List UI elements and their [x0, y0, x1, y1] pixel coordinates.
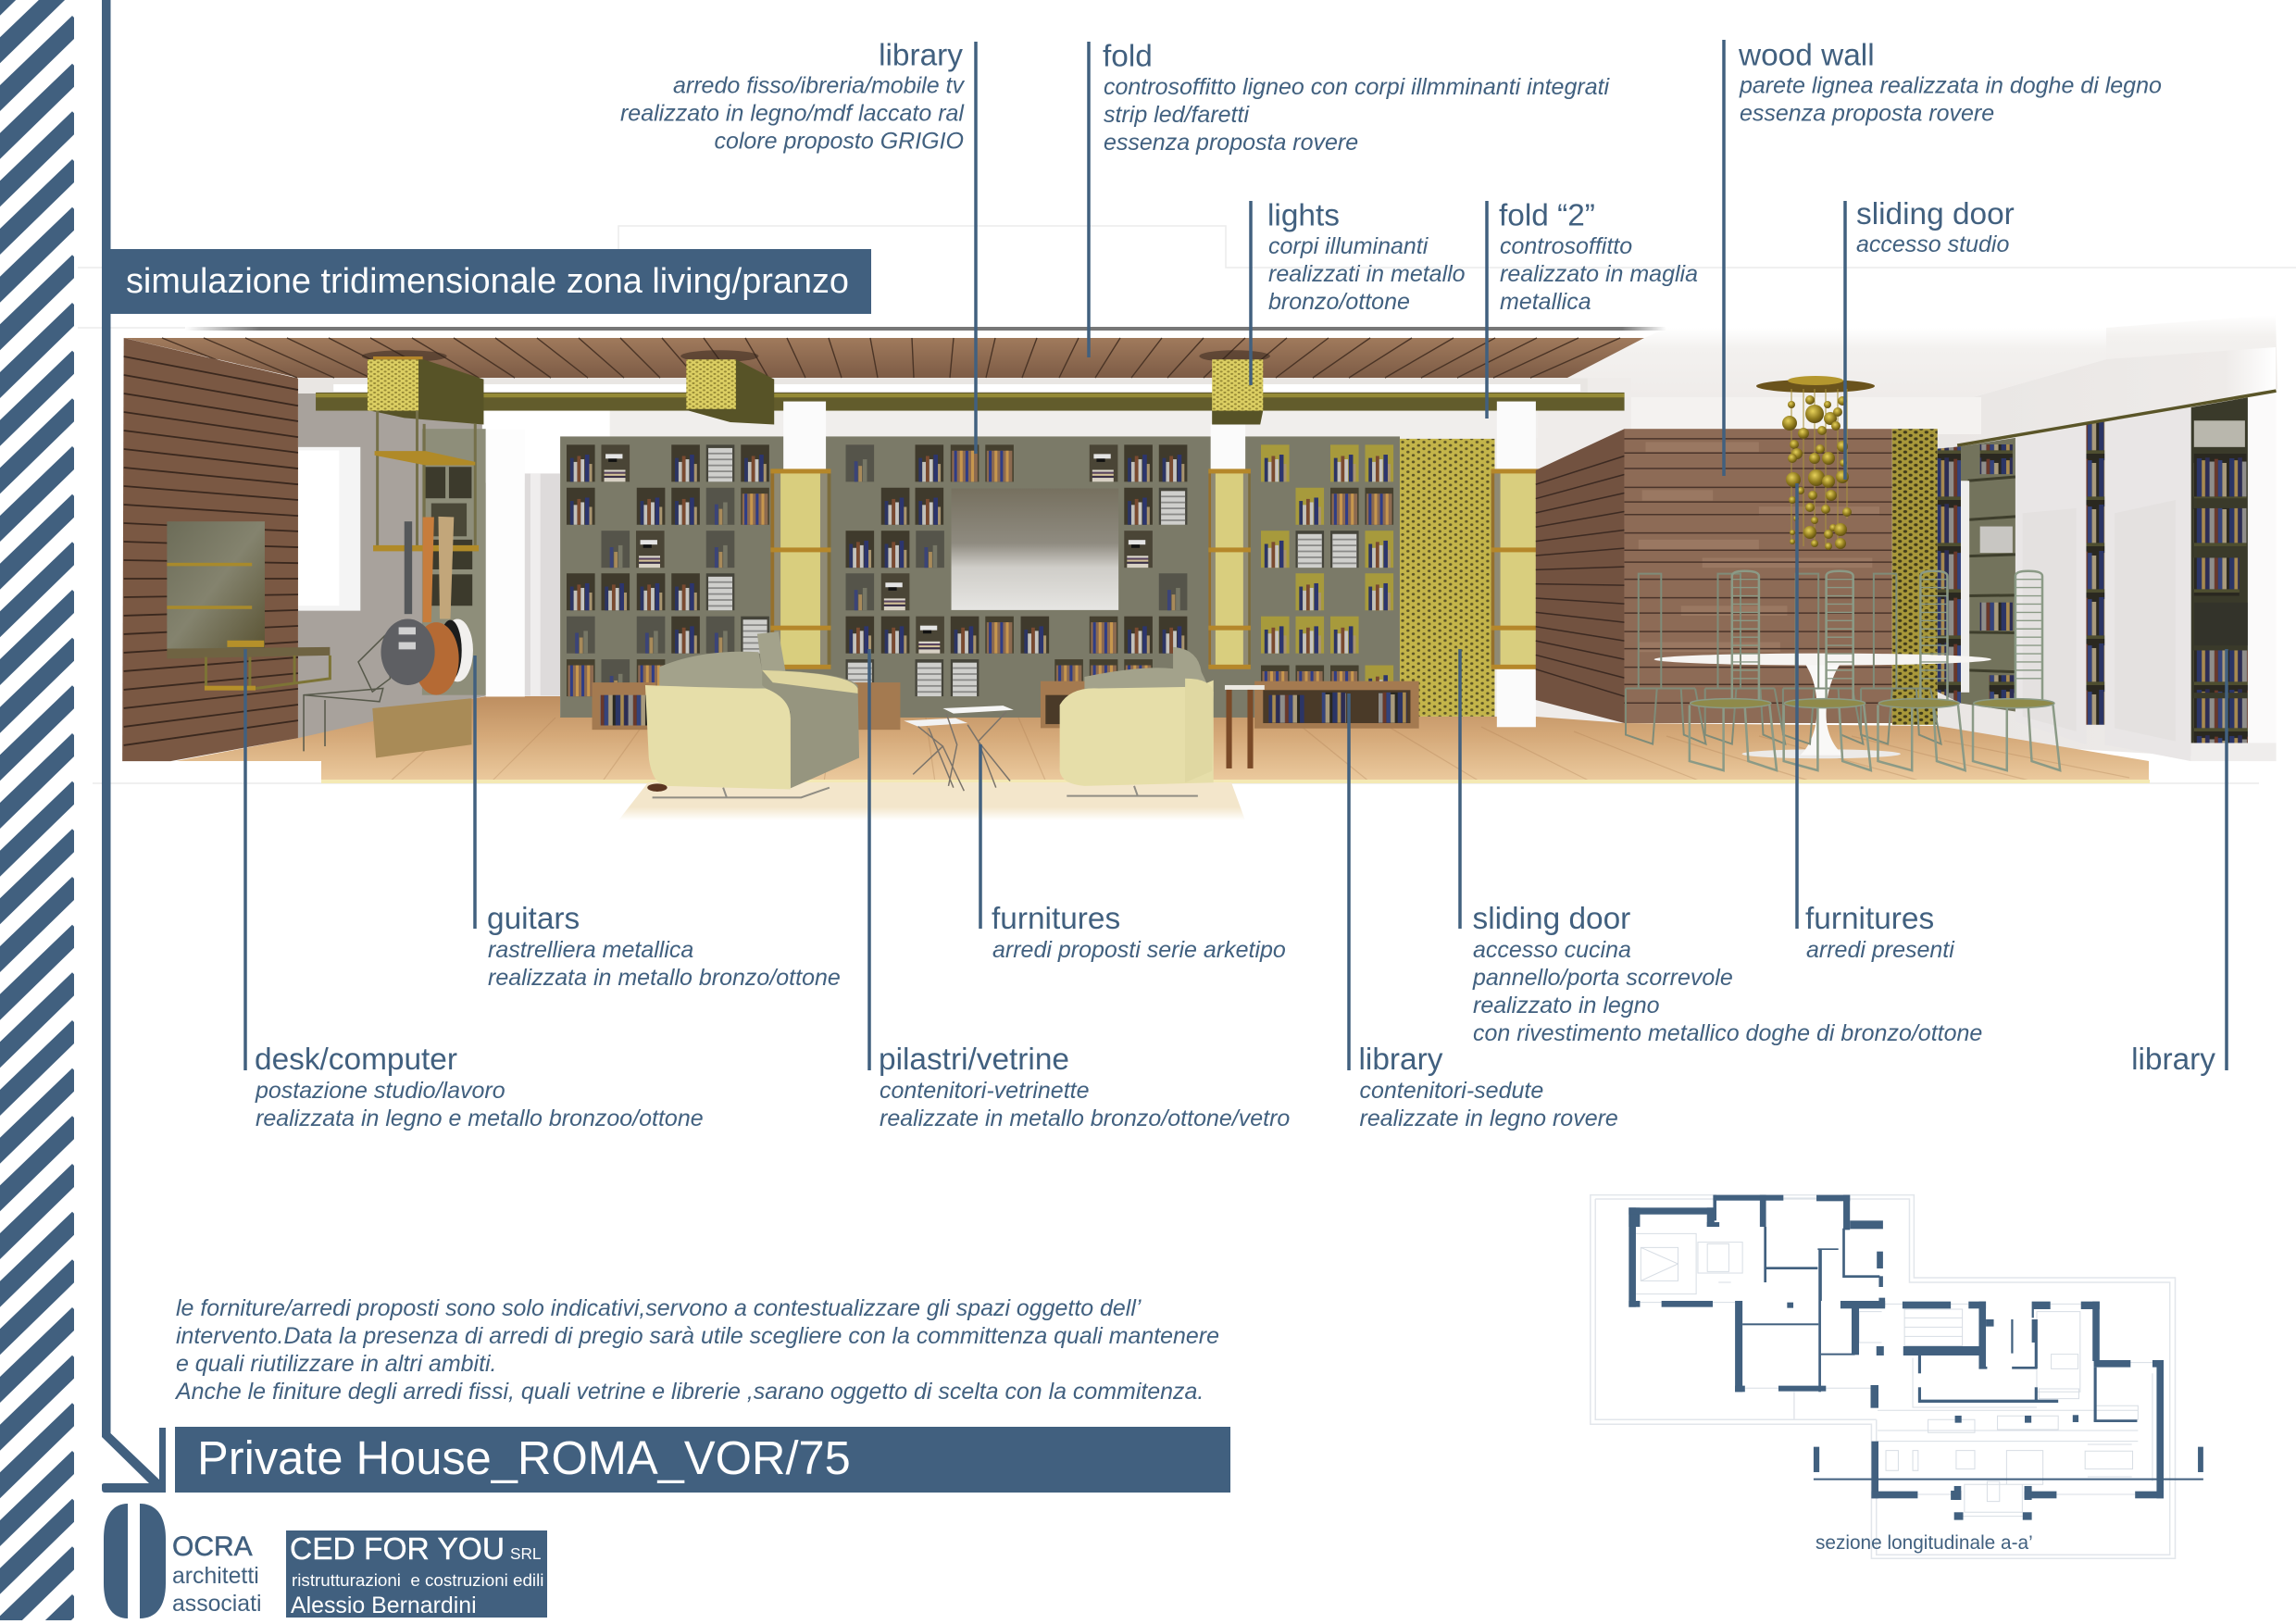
leader lines from labels to render — [245, 40, 2227, 1070]
caption: sezione: sezione longitudinale a-a’ — [1816, 1532, 2033, 1554]
label: library seats: library — [1359, 1043, 1443, 1077]
furniture linework — [1636, 1198, 2152, 1517]
label: wood wall: wood wall — [1738, 39, 1875, 72]
label: wood wall: essenza proposta rovere — [1740, 100, 1994, 126]
coffee tables — [904, 706, 1014, 791]
label: fold 2: metallica — [1500, 289, 1591, 315]
label: lights: lights — [1267, 198, 1340, 233]
left half of the room — [122, 338, 1625, 797]
showcase pillars — [770, 468, 1547, 669]
label: library right: library — [2131, 1043, 2215, 1077]
dark perforated panel — [1892, 429, 1938, 725]
label: sliding door bottom: sliding door — [1472, 902, 1630, 936]
left frame bar and corner arrow — [102, 0, 166, 1493]
guitars — [381, 517, 473, 695]
right sofa — [1060, 647, 1214, 796]
label: fold: controsoffitto ligneo con corpi illmminanti integrati — [1104, 74, 1611, 100]
label: sliding door bottom — [1472, 902, 1982, 1046]
golden chandelier — [1756, 376, 1875, 550]
book niches — [567, 444, 1393, 703]
label: library top: library — [879, 39, 963, 72]
logo text: associati — [172, 1592, 261, 1617]
label: wood wall: parete lignea realizzata in doghe di legno — [1739, 72, 2162, 98]
plaster ceiling and walls right — [1528, 315, 2277, 761]
label: sliding door bottom: pannello/porta scorrevole — [1472, 965, 1733, 991]
label: lights — [1267, 198, 1466, 315]
rug under sofas — [618, 782, 1245, 820]
label: fold: essenza proposta rovere — [1104, 130, 1358, 156]
label: fold 2: realizzato in maglia — [1500, 261, 1698, 287]
label: fold 2: controsoffitto — [1500, 233, 1632, 259]
faint construction lines — [78, 226, 2296, 783]
label: wood wall — [1738, 39, 2162, 126]
label: pilastri/vetrine — [879, 1043, 1290, 1131]
perforated sliding panel — [1400, 439, 1495, 717]
CED FOR YOU box: Alessio Bernardini — [291, 1593, 477, 1618]
banner: simulazione — [110, 249, 871, 314]
left wood wall — [122, 338, 298, 761]
label: library top: realizzato in legno/mdf laccato ral — [620, 100, 965, 126]
label: pilastri/vetrine: realizzate in metallo bronzo/ottone/vetro — [880, 1106, 1290, 1131]
desk chair — [304, 634, 390, 751]
ceiling light boxes — [362, 350, 1270, 425]
descriptive note: e quali riutilizzare in altri ambiti. — [176, 1351, 496, 1377]
label: library seats: realizzate in legno rovere — [1359, 1106, 1618, 1131]
logo text — [172, 1531, 261, 1617]
label: sliding door bottom: realizzato in legno — [1473, 993, 1660, 1018]
OCRA logo — [104, 1504, 261, 1618]
label: furnitures right: furnitures — [1805, 902, 1934, 936]
descriptive note — [174, 1295, 1219, 1405]
label: desk/computer: realizzata in legno e metallo bronzoo/ottone — [256, 1106, 704, 1131]
label: lights: bronzo/ottone — [1268, 289, 1410, 315]
label: library top: colore proposto GRIGIO — [714, 128, 964, 154]
floor plan — [1591, 1195, 2203, 1558]
label: desk/computer — [255, 1043, 704, 1131]
label: fold 2: fold “2” — [1499, 198, 1595, 233]
diagonal stripe border — [0, 0, 74, 1624]
label: library seats: contenitori-sedute — [1359, 1078, 1543, 1104]
label: fold: strip led/faretti — [1104, 102, 1250, 128]
label: lights: realizzati in metallo — [1268, 261, 1466, 287]
white band, strip light and metal soffit — [298, 379, 1625, 482]
label: guitars: realizzata in metallo bronzo/ottone — [488, 965, 841, 991]
terrace outline — [1591, 1195, 2176, 1558]
label: fold: fold — [1103, 39, 1153, 74]
label: library seats — [1359, 1043, 1618, 1131]
label: desk/computer: postazione studio/lavoro — [255, 1078, 505, 1104]
label: fold — [1103, 39, 1611, 156]
descriptive note: intervento.Data la presenza di arredi di pregio sarà utile scegliere con la committenza quali mantenere — [176, 1323, 1219, 1349]
walls — [1628, 1195, 2164, 1520]
label: fold 2 — [1499, 198, 1698, 315]
label: sliding door bottom: con rivestimento metallico doghe di bronzo/ottone — [1473, 1020, 1982, 1046]
right half of the room — [1536, 391, 2277, 770]
wood floor — [176, 696, 2150, 783]
grey edge line — [185, 327, 1666, 331]
logo text: OCRA — [172, 1531, 253, 1562]
label: furnitures right: arredi presenti — [1806, 937, 1955, 963]
title banner — [175, 1427, 1230, 1493]
label: guitars — [487, 902, 841, 991]
dining chairs — [1626, 571, 2060, 770]
label: desk/computer: desk/computer — [255, 1043, 457, 1077]
logo text: architetti — [172, 1564, 259, 1589]
guitar rack — [378, 411, 475, 551]
corner wood wall — [1536, 429, 1892, 723]
CED FOR YOU box: SRL — [510, 1544, 541, 1563]
rear shelving, white column and door — [422, 429, 560, 696]
label: furnitures center: furnitures — [992, 902, 1120, 936]
3D render: living and dining area — [122, 315, 2277, 820]
label: sliding door top: sliding door — [1856, 197, 2015, 231]
label: furnitures center — [992, 902, 1286, 963]
banner: simulazione: simulazione tridimensionale zona living/pranzo — [126, 262, 849, 301]
oval dining table — [1654, 654, 1991, 758]
title banner: Private House_ROMA_VOR/75 — [197, 1431, 851, 1484]
label: sliding door top — [1856, 197, 2015, 257]
wardrobes and libraries on right wall — [1938, 391, 2277, 761]
descriptive note: le forniture/arredi proposti sono solo indicativi,servono a contestualizzare gli spazi oggetto dell’ — [176, 1295, 1142, 1321]
logo mark — [104, 1504, 166, 1618]
label: guitars: rastrelliera metallica — [488, 937, 693, 963]
CED FOR YOU box — [286, 1530, 547, 1618]
wooden ceiling — [124, 338, 1644, 378]
label: sliding door bottom: accesso cucina — [1473, 937, 1631, 963]
label: library top — [620, 39, 965, 154]
library wall — [560, 436, 1400, 718]
label: pilastri/vetrine: contenitori-vetrinette — [880, 1078, 1090, 1104]
white columns — [783, 402, 1536, 727]
desk with wall niche — [167, 521, 330, 691]
label: furnitures center: arredi proposti serie arketipo — [992, 937, 1286, 963]
section line a-a' — [1814, 1447, 2203, 1480]
left sofa — [645, 631, 859, 797]
label: lights: corpi illuminanti — [1268, 233, 1429, 259]
label: furnitures right — [1805, 902, 1955, 963]
tv panel — [952, 488, 1118, 610]
wooden bench — [372, 698, 471, 758]
descriptive note: Anche le finiture degli arredi fissi, quali vetrine e librerie ,sarano oggetto di scelta con la commitenza. — [174, 1379, 1204, 1405]
label: guitars: guitars — [487, 902, 580, 936]
back wall — [298, 378, 1631, 722]
label: library top: arredo fisso/ibreria/mobile tv — [673, 72, 965, 98]
label: pilastri/vetrine: pilastri/vetrine — [879, 1043, 1069, 1077]
wooden cabinets with books — [593, 681, 1419, 768]
CED FOR YOU box: CED FOR YOU — [290, 1532, 505, 1567]
label: sliding door top: accesso studio — [1856, 231, 2009, 257]
CED FOR YOU box: ristrutturazioni e costruzioni edili — [292, 1570, 543, 1590]
grey side wall with window — [298, 379, 490, 738]
